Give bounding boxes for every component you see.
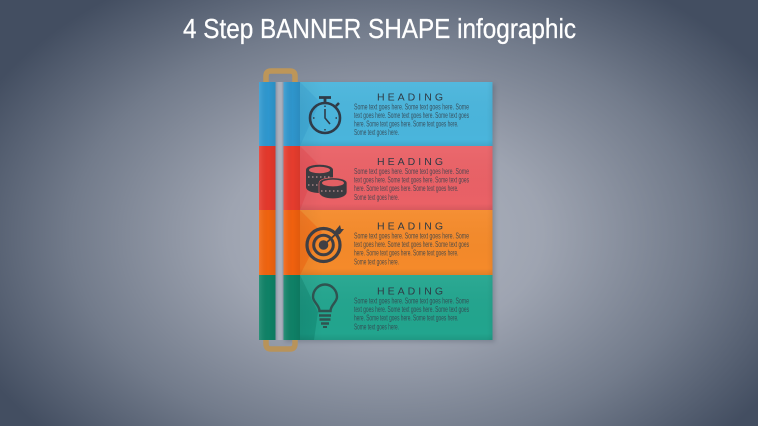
strip shading bbox=[259, 82, 492, 340]
text block: step 3: HEADING bbox=[377, 220, 443, 232]
panel: step 3 orange bbox=[259, 210, 492, 275]
text block: step 1: here. Some text goes here. Some text goes here. bbox=[354, 120, 458, 128]
text block: step 4: text goes here. Some text goes here. Some text goes bbox=[354, 305, 469, 314]
text block: step 1: text goes here. Some text goes here. Some text goes bbox=[354, 111, 469, 120]
text block: step 3: text goes here. Some text goes here. Some text goes bbox=[354, 240, 469, 249]
text block: step 4: here. Some text goes here. Some text goes here. bbox=[354, 314, 458, 322]
icon: stopwatch bbox=[310, 98, 340, 133]
text block: step 2: Some text goes here. Some text goes here. Some bbox=[354, 167, 469, 176]
text block: step 2 bbox=[354, 156, 469, 202]
text block: step 4: HEADING bbox=[377, 286, 443, 298]
text block: step 4 bbox=[354, 286, 469, 332]
text block: step 3 bbox=[354, 220, 469, 266]
banner shadow bbox=[285, 84, 495, 342]
icon: coins bbox=[306, 165, 347, 199]
panel: step 1 blue bbox=[259, 82, 492, 146]
panel: step 4 green bbox=[259, 275, 492, 340]
text block: step 1 bbox=[354, 92, 469, 137]
bottom ring bbox=[266, 339, 295, 349]
text block: step 1: Some text goes here. Some text goes here. Some bbox=[354, 102, 469, 112]
text block: step 3: Some text goes here. bbox=[354, 258, 399, 266]
text block: step 2: text goes here. Some text goes here. Some text goes bbox=[354, 176, 469, 184]
text block: step 2: Some text goes here. bbox=[354, 193, 399, 202]
top ring bbox=[266, 71, 295, 83]
icon: light bulb bbox=[313, 284, 337, 327]
title: 4 Step BANNER SHAPE infographic bbox=[183, 13, 576, 44]
panel: step 2 red bbox=[259, 146, 492, 210]
text block: step 2: here. Some text goes here. Some text goes here. bbox=[354, 184, 458, 193]
gap between strips bbox=[275, 82, 284, 340]
text block: step 4: Some text goes here. bbox=[354, 322, 399, 332]
text block: step 3: here. Some text goes here. Some text goes here. bbox=[354, 248, 458, 258]
text block: step 1: HEADING bbox=[377, 92, 443, 104]
banner graphic bbox=[259, 71, 495, 349]
text block: step 1: Some text goes here. bbox=[354, 128, 399, 137]
text block: step 2: HEADING bbox=[377, 156, 443, 168]
icon: target bbox=[307, 225, 344, 262]
text block: step 4: Some text goes here. Some text goes here. Some bbox=[354, 296, 469, 306]
text block: step 3: Some text goes here. Some text goes here. Some bbox=[354, 232, 469, 240]
